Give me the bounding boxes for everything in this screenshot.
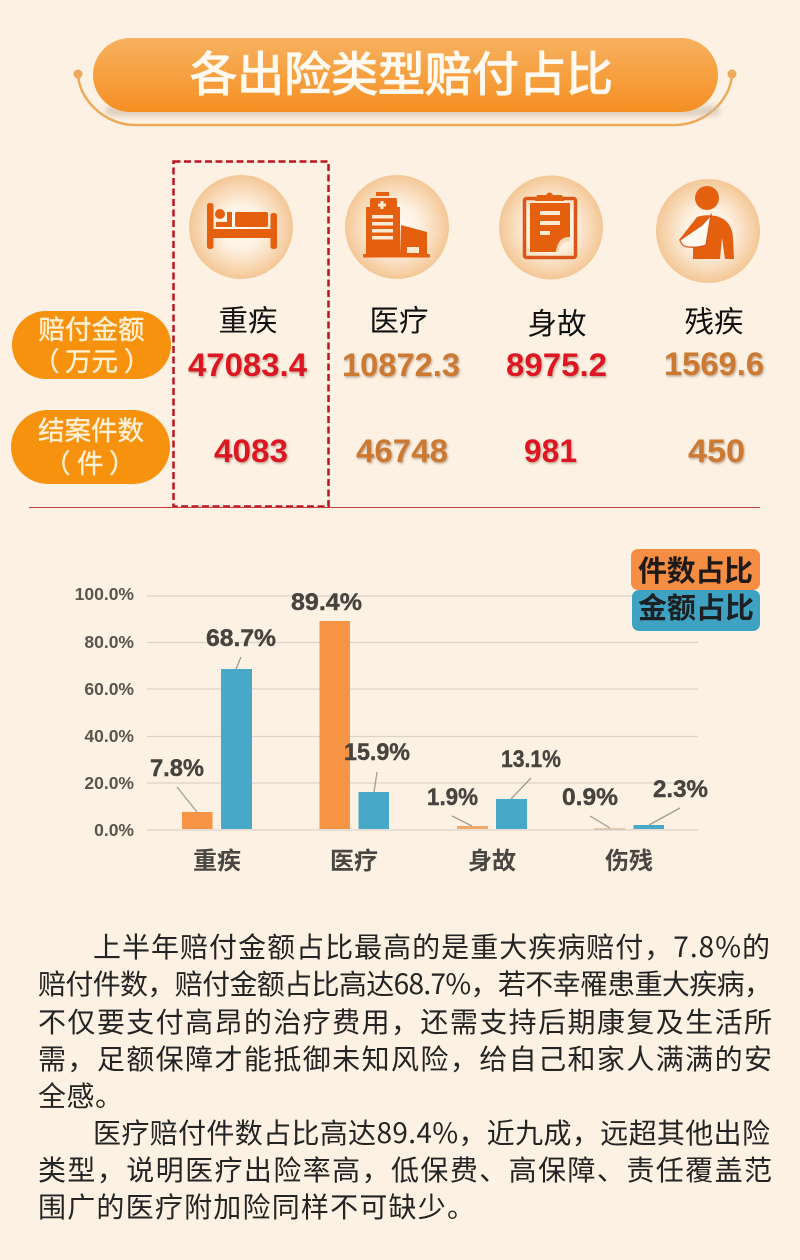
icon: injured person — [656, 179, 760, 283]
orange bars: case share — [182, 621, 625, 830]
y axis labels: 0.0% — [94, 820, 134, 840]
data labels — [150, 589, 708, 811]
payout amount values: 10872.3 — [342, 347, 460, 383]
data labels: 15.9% — [344, 739, 410, 766]
legend: 金额占比 — [638, 585, 754, 627]
data labels: 0.9% — [562, 784, 618, 811]
data labels: 68.7% — [206, 625, 276, 652]
closed case values: 46748 — [356, 433, 448, 469]
title text: 各出险类型赔付占比 — [190, 36, 613, 105]
x axis labels: 身故 — [468, 841, 516, 876]
body text paragraph 1 — [38, 926, 772, 1115]
category labels: 残疾 — [684, 299, 744, 341]
category labels: 医疗 — [369, 298, 429, 340]
payout amount values: 47083.4 — [188, 347, 307, 383]
body text paragraph 1: 赔付件数，赔付金额占比高达68.7%，若不幸罹患重大疾病， — [38, 963, 772, 1003]
body text paragraph 2: 医疗赔付件数占比高达89.4%，近九成，远超其他出险 — [93, 1112, 770, 1152]
body text paragraph 2: 围广的医疗附加险同样不可缺少。 — [38, 1186, 475, 1226]
closed case values: 981 — [524, 433, 577, 469]
divider line — [29, 507, 760, 508]
banner arc decoration — [74, 70, 736, 125]
category labels: 身故 — [527, 301, 587, 343]
y axis labels: 40.0% — [84, 726, 134, 746]
closed case values: 4083 — [214, 433, 288, 469]
grid lines — [147, 596, 698, 830]
data labels: 1.9% — [427, 784, 478, 811]
payout amount values: 1569.6 — [664, 346, 764, 382]
icon: bed — [189, 175, 293, 279]
icon: hospital — [345, 175, 449, 279]
row label: payout amount: 赔付金额 — [38, 308, 144, 347]
row label: closed cases: ） — [109, 442, 136, 481]
payout amount values: 8975.2 — [506, 347, 607, 383]
bar chart — [75, 584, 708, 876]
legend — [631, 548, 760, 631]
category labels — [218, 298, 744, 343]
body text paragraph 2 — [38, 1112, 772, 1226]
data labels: 13.1% — [501, 746, 561, 773]
blue bars: amount share — [221, 669, 664, 829]
data labels: 2.3% — [653, 776, 708, 803]
data labels: 89.4% — [291, 589, 362, 616]
closed case values — [214, 433, 745, 469]
body text paragraph 1: 需，足额保障才能抵御未知风险，给自己和家人满满的安 — [38, 1038, 772, 1078]
x axis labels — [193, 841, 653, 876]
y axis labels: 80.0% — [84, 632, 134, 652]
row label: closed cases — [11, 409, 170, 484]
row label: payout amount: （ — [33, 340, 60, 379]
payout amount values — [188, 346, 764, 383]
body text paragraph 2: 类型，说明医疗出险率高，低保费、高保障、责任覆盖范 — [38, 1149, 772, 1189]
y axis labels: 20.0% — [84, 773, 134, 793]
row label: closed cases: 件 — [77, 442, 104, 481]
body text paragraph 1: 全感。 — [38, 1075, 123, 1115]
body text paragraph 1: 不仅要支付高昂的治疗费用，还需支持后期康复及生活所 — [38, 1001, 772, 1041]
row label: closed cases: 结案件数 — [38, 409, 144, 448]
x axis labels: 医疗 — [330, 841, 378, 876]
row label: payout amount: ） — [124, 340, 150, 379]
banner shadow — [105, 106, 720, 116]
icon: clipboard — [499, 176, 603, 280]
closed case values: 450 — [688, 433, 745, 469]
body text paragraph 1: 上半年赔付金额占比最高的是重大疾病赔付，7.8%的 — [93, 926, 770, 966]
x axis labels: 重疾 — [193, 841, 241, 876]
category labels: 重疾 — [218, 298, 278, 340]
y axis labels: 60.0% — [84, 679, 134, 699]
y axis labels — [75, 584, 134, 840]
leader lines — [177, 657, 680, 828]
title banner — [74, 36, 736, 125]
row label: payout amount — [12, 308, 171, 379]
x axis labels: 伤残 — [605, 841, 653, 876]
highlight dashed box — [174, 162, 328, 506]
row label: payout amount: 万元 — [65, 340, 118, 379]
banner pill — [93, 38, 718, 112]
row label: closed cases: （ — [44, 442, 70, 481]
legend: 件数占比 — [638, 548, 753, 590]
data labels: 7.8% — [150, 755, 204, 782]
y axis labels: 100.0% — [75, 584, 134, 604]
